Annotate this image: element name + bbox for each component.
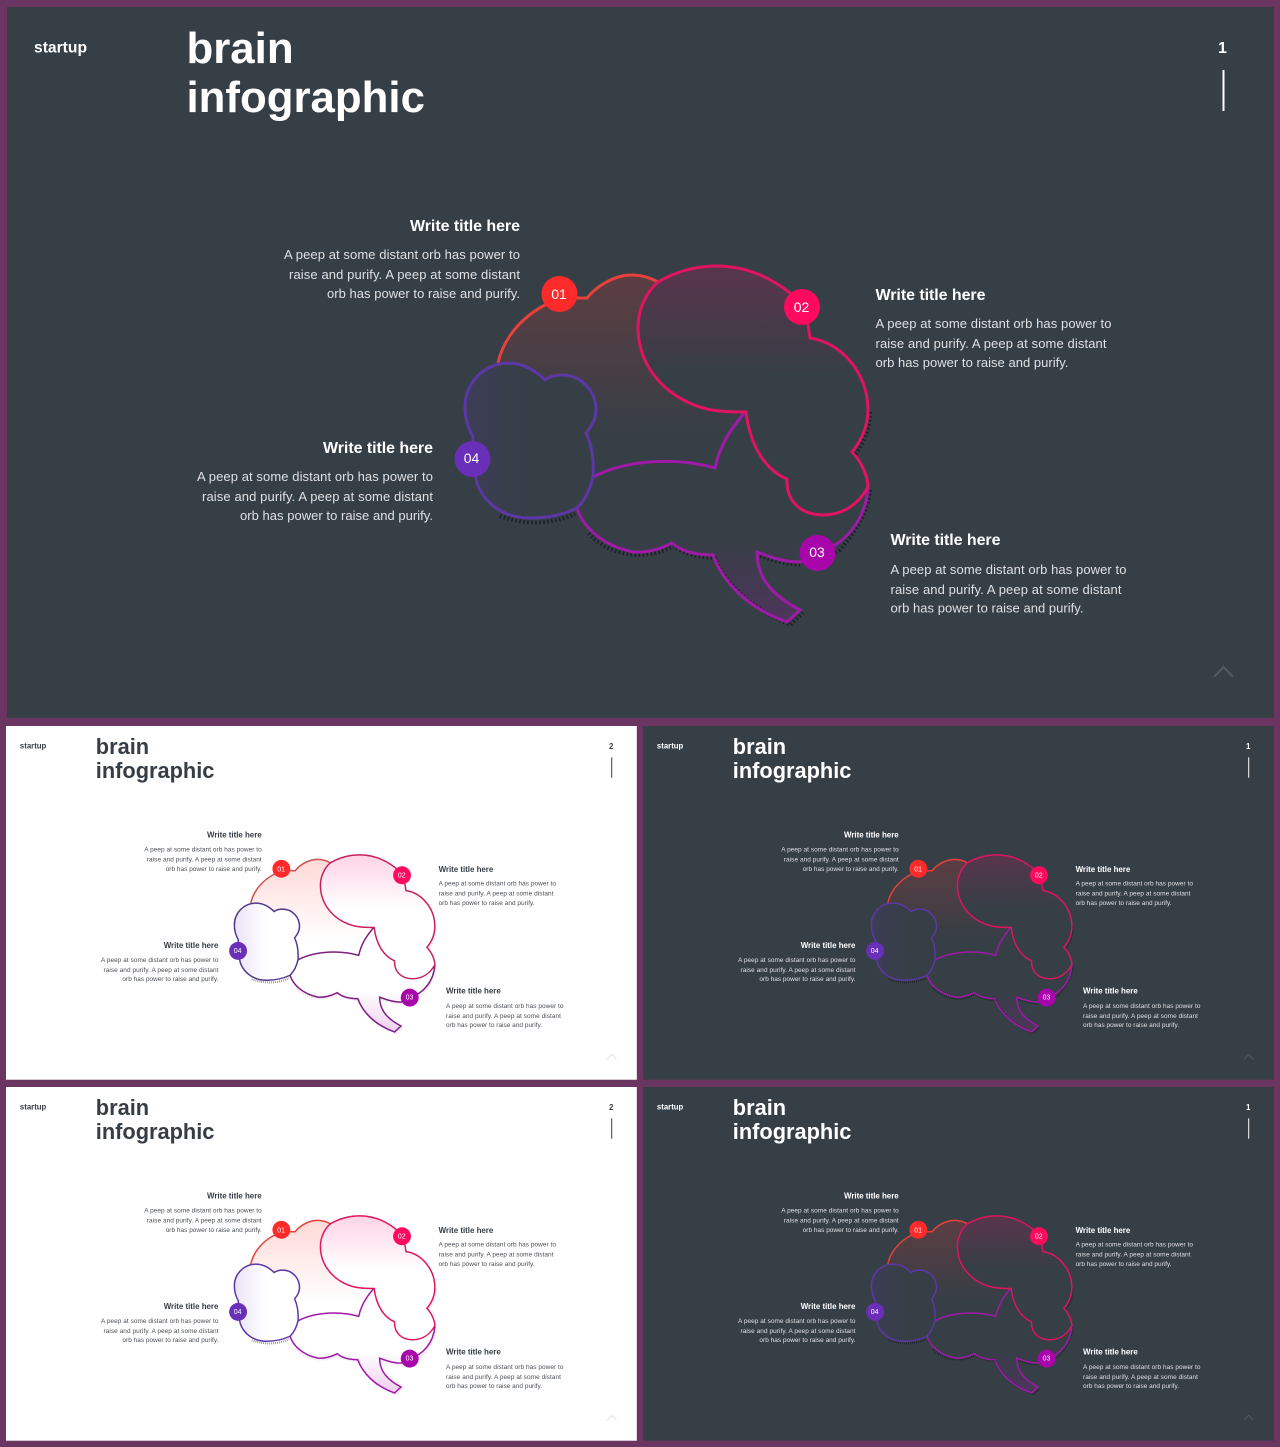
text block 4: A peep at some distant orb has power to (101, 1318, 219, 1325)
icon: up chevron (1244, 1054, 1253, 1059)
badge 04 (866, 942, 884, 960)
text block 2: A peep at some distant orb has power to (439, 1242, 556, 1249)
brand label: startup (657, 742, 683, 751)
title: infographic (733, 758, 851, 783)
badge 01: 01 (277, 1227, 285, 1234)
badge 03 (401, 989, 419, 1007)
slide panel background (6, 1087, 637, 1441)
title: brain (186, 24, 294, 73)
text block 2 (876, 287, 1112, 370)
text block 4: orb has power to raise and purify. (759, 1337, 856, 1344)
icon: up chevron (1244, 1415, 1253, 1420)
text block 3: orb has power to raise and purify. (1083, 1383, 1179, 1390)
text block 3: Write title here (446, 1348, 501, 1357)
text block 1: A peep at some distant orb has power to (781, 1207, 899, 1214)
text block 4: Write title here (801, 1302, 856, 1311)
brand label: startup (20, 742, 46, 751)
text block 1: Write title here (844, 830, 899, 839)
text block 3: A peep at some distant orb has power to (1083, 1003, 1201, 1010)
text block 4: Write title here (323, 440, 433, 457)
text block 4: A peep at some distant orb has power to (101, 957, 219, 964)
text block 2: Write title here (876, 287, 986, 304)
text block 3 (1083, 1348, 1201, 1390)
brand label: startup (34, 40, 87, 56)
brand label: startup (657, 1103, 683, 1112)
text block 3: raise and purify. A peep at some distant (890, 582, 1122, 597)
badge 04 (229, 1303, 247, 1321)
text block 2: Write title here (439, 865, 494, 874)
title: brain (733, 1095, 786, 1120)
text block 4: Write title here (164, 941, 219, 950)
text block 4: raise and purify. A peep at some distant (741, 1328, 856, 1335)
text block 4: A peep at some distant orb has power to (738, 1318, 856, 1325)
text block 3: A peep at some distant orb has power to (890, 562, 1126, 577)
text block 1 (144, 830, 262, 873)
title: infographic (186, 73, 425, 122)
small light slide, top left (6, 726, 637, 1080)
text block 4: A peep at some distant orb has power to (738, 957, 856, 964)
badge 01 (909, 1221, 927, 1239)
badge 01: 01 (277, 866, 285, 873)
page number (1246, 742, 1251, 778)
badge 04 (866, 1303, 884, 1321)
badge 03 (1038, 989, 1056, 1007)
text block 3: Write title here (446, 987, 501, 996)
text block 4 (738, 941, 856, 983)
text block 2: orb has power to raise and purify. (876, 355, 1068, 370)
text block 2: A peep at some distant orb has power to (876, 316, 1112, 331)
text block 1: orb has power to raise and purify. (166, 1227, 262, 1234)
text block 3 (890, 532, 1126, 616)
text block 1: A peep at some distant orb has power to (781, 846, 899, 853)
page number: 1 (1246, 742, 1251, 751)
badge 02: 02 (794, 299, 809, 315)
brain diagram (234, 1216, 436, 1394)
text block 2: A peep at some distant orb has power to (1076, 1242, 1193, 1249)
text block 4 (101, 1302, 219, 1344)
badge 02 (1030, 1227, 1048, 1245)
text block 2: orb has power to raise and purify. (1076, 1261, 1172, 1268)
text block 3: orb has power to raise and purify. (1083, 1022, 1179, 1029)
text block 3: Write title here (1083, 1348, 1138, 1357)
text block 1 (144, 1191, 262, 1234)
text block 3: Write title here (890, 532, 1001, 549)
title (733, 1095, 851, 1144)
icon: up chevron (1214, 667, 1233, 677)
text block 3 (446, 1348, 564, 1390)
page number (609, 1103, 614, 1139)
text block 1: orb has power to raise and purify. (803, 1227, 899, 1234)
badge 01: 01 (914, 1227, 922, 1234)
text block 3: raise and purify. A peep at some distant (1083, 1374, 1198, 1381)
text block 2: orb has power to raise and purify. (439, 900, 535, 907)
text block 2: Write title here (1076, 865, 1131, 874)
badge 04: 04 (234, 1309, 242, 1316)
brand label: startup (20, 1103, 46, 1112)
text block 3: orb has power to raise and purify. (446, 1022, 542, 1029)
text block 4: raise and purify. A peep at some distant (202, 489, 433, 504)
text block 2 (1076, 1226, 1193, 1268)
text block 4 (101, 941, 219, 983)
title: infographic (96, 1119, 214, 1144)
badge 03: 03 (809, 544, 825, 560)
badge 02 (393, 1227, 411, 1245)
slide panel background (643, 1087, 1274, 1441)
text block 3: raise and purify. A peep at some distant (446, 1374, 561, 1381)
badge 02: 02 (398, 1234, 406, 1241)
icon: up chevron (607, 1415, 616, 1420)
text block 2: raise and purify. A peep at some distant (439, 891, 554, 898)
text block 2: orb has power to raise and purify. (1076, 900, 1172, 907)
text block 3: Write title here (1083, 987, 1138, 996)
text block 2: A peep at some distant orb has power to (439, 881, 556, 888)
text block 2: raise and purify. A peep at some distant (439, 1252, 554, 1259)
text block 3: A peep at some distant orb has power to (446, 1003, 564, 1010)
text block 4: orb has power to raise and purify. (122, 1337, 219, 1344)
text block 1: Write title here (844, 1191, 899, 1200)
title (96, 1095, 214, 1144)
page number (1218, 40, 1227, 111)
text block 2: raise and purify. A peep at some distant (1076, 891, 1191, 898)
badge 04: 04 (464, 450, 479, 466)
badge 04: 04 (234, 948, 242, 955)
brain diagram (234, 855, 436, 1033)
badge 04 (454, 441, 490, 477)
badge 02 (784, 289, 820, 325)
badge 04: 04 (871, 948, 879, 955)
title (186, 24, 425, 122)
badge 01: 01 (914, 866, 922, 873)
badge 01 (272, 1221, 290, 1239)
badge 04: 04 (871, 1309, 879, 1316)
badge 03 (800, 535, 836, 571)
brain diagram (871, 1216, 1073, 1394)
text block 4 (738, 1302, 856, 1344)
text block 1: orb has power to raise and purify. (327, 286, 520, 301)
page number: 1 (1246, 1103, 1251, 1112)
text block 3: raise and purify. A peep at some distant (1083, 1013, 1198, 1020)
text block 2: raise and purify. A peep at some distant (1076, 1252, 1191, 1259)
text block 2 (439, 1226, 556, 1268)
text block 1: raise and purify. A peep at some distant (147, 1217, 262, 1224)
title (96, 734, 214, 783)
text block 1: A peep at some distant orb has power to (144, 846, 262, 853)
text block 3: raise and purify. A peep at some distant (446, 1013, 561, 1020)
title: infographic (96, 758, 214, 783)
text block 4: raise and purify. A peep at some distant (104, 1328, 219, 1335)
text block 1: raise and purify. A peep at some distant (784, 856, 899, 863)
text block 3: orb has power to raise and purify. (890, 600, 1084, 616)
text block 4: orb has power to raise and purify. (122, 976, 219, 983)
text block 2: Write title here (1076, 1226, 1131, 1235)
badge 03: 03 (406, 1356, 413, 1363)
text block 1: raise and purify. A peep at some distant (784, 1217, 899, 1224)
brain diagram (871, 855, 1073, 1033)
text block 3 (446, 987, 564, 1029)
page number: 1 (1218, 40, 1227, 57)
page number (1246, 1103, 1251, 1139)
badge 02: 02 (1035, 1234, 1043, 1241)
text block 1: A peep at some distant orb has power to (144, 1207, 262, 1214)
text block 4: raise and purify. A peep at some distant (104, 967, 219, 974)
badge 01 (272, 860, 290, 878)
small dark slide, bottom right (643, 1087, 1274, 1441)
text block 2 (1076, 865, 1193, 907)
text block 3: A peep at some distant orb has power to (1083, 1364, 1201, 1371)
page number: 2 (609, 1103, 614, 1112)
badge 03: 03 (1043, 1356, 1050, 1363)
text block 1: orb has power to raise and purify. (803, 866, 899, 873)
slide panel background (6, 726, 637, 1080)
text block 2: orb has power to raise and purify. (439, 1261, 535, 1268)
text block 4: raise and purify. A peep at some distant (741, 967, 856, 974)
text block 2: Write title here (439, 1226, 494, 1235)
title: brain (733, 734, 786, 759)
title (733, 734, 851, 783)
text block 1 (781, 1191, 899, 1234)
text block 2: A peep at some distant orb has power to (1076, 881, 1193, 888)
badge 04 (229, 942, 247, 960)
text block 2 (439, 865, 556, 907)
badge 01: 01 (551, 286, 567, 302)
slide panel background (643, 726, 1274, 1080)
text block 4: orb has power to raise and purify. (240, 508, 433, 523)
badge 03: 03 (1043, 995, 1050, 1002)
text block 4: Write title here (164, 1302, 219, 1311)
badge 03 (401, 1350, 419, 1368)
text block 4 (197, 440, 433, 523)
text block 1: Write title here (207, 1191, 262, 1200)
text block 4: Write title here (801, 941, 856, 950)
text block 1: raise and purify. A peep at some distant (289, 267, 520, 282)
text block 1 (284, 218, 520, 301)
brain diagram (465, 266, 870, 625)
text block 1: Write title here (410, 218, 520, 235)
text block 3: orb has power to raise and purify. (446, 1383, 542, 1390)
text block 4: A peep at some distant orb has power to (197, 469, 433, 484)
text block 1 (781, 830, 899, 873)
badge 02 (393, 866, 411, 884)
slide panel background (7, 7, 1274, 718)
badge 02: 02 (398, 873, 406, 880)
badge 03: 03 (406, 995, 413, 1002)
main dark slide (7, 7, 1274, 718)
page number: 2 (609, 742, 614, 751)
text block 4: orb has power to raise and purify. (759, 976, 856, 983)
text block 1: Write title here (207, 830, 262, 839)
text block 3: A peep at some distant orb has power to (446, 1364, 564, 1371)
title: brain (96, 734, 149, 759)
title: infographic (733, 1119, 851, 1144)
page number (609, 742, 614, 778)
title: brain (96, 1095, 149, 1120)
text block 3 (1083, 987, 1201, 1029)
small dark slide, top right (643, 726, 1274, 1080)
text block 1: orb has power to raise and purify. (166, 866, 262, 873)
badge 01 (909, 860, 927, 878)
badge 03 (1038, 1350, 1056, 1368)
icon: up chevron (607, 1054, 616, 1059)
text block 2: raise and purify. A peep at some distant (876, 336, 1107, 351)
text block 1: A peep at some distant orb has power to (284, 247, 520, 262)
badge 02 (1030, 866, 1048, 884)
small light slide, bottom left (6, 1087, 637, 1441)
badge 02: 02 (1035, 873, 1043, 880)
text block 1: raise and purify. A peep at some distant (147, 856, 262, 863)
badge 01 (542, 276, 578, 312)
